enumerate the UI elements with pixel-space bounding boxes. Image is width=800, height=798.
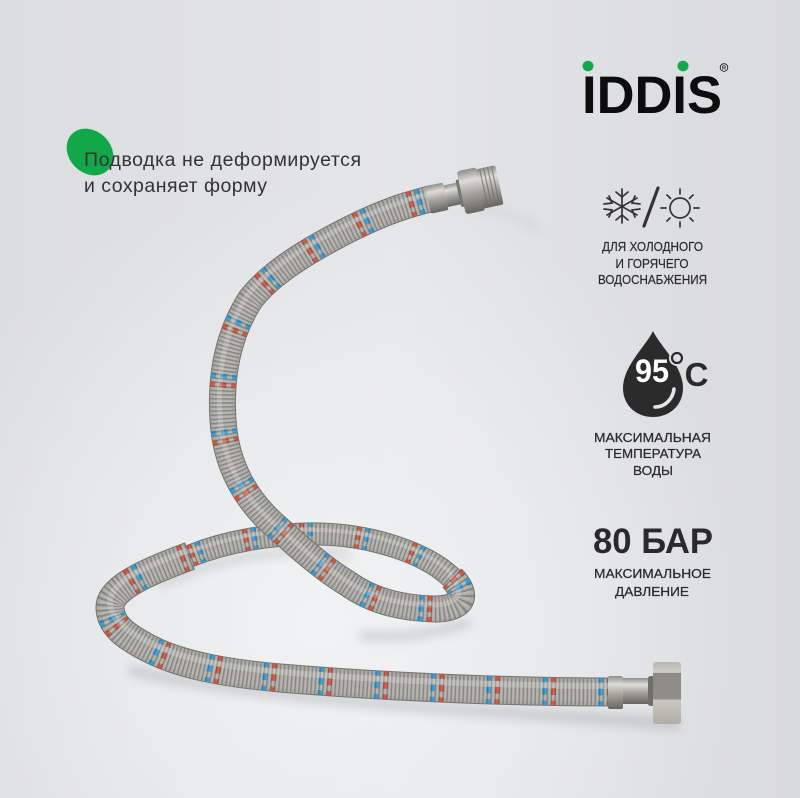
hose: bottom run and left of loop xyxy=(110,550,612,692)
hose: near loop and rising arc xyxy=(219,194,462,609)
green blob accent xyxy=(57,119,123,185)
icon: sun xyxy=(661,189,699,227)
caption: max pressure: ДАВЛЕНИЕ xyxy=(615,584,689,599)
caption: max pressure: МАКСИМАЛЬНОЕ xyxy=(594,566,711,581)
logo: IDDIS: IDDIS xyxy=(582,66,722,125)
feature text: shape retention xyxy=(84,149,361,197)
caption: max water temperature: ТЕМПЕРАТУРА xyxy=(605,446,701,461)
icon: water drop 95°C: 95 xyxy=(635,353,669,389)
caption: max water temperature: ВОДЫ xyxy=(633,463,673,478)
logo: IDDIS: R xyxy=(722,66,726,72)
caption: hot and cold supply: ДЛЯ ХОЛОДНОГО xyxy=(602,240,703,254)
feature text: shape retention: Подводка не деформируется xyxy=(84,149,361,171)
caption: hot and cold supply xyxy=(598,240,707,287)
caption: max water temperature xyxy=(594,430,711,478)
bottom female nut fitting xyxy=(608,662,681,724)
hose shadows xyxy=(130,205,680,724)
icon: water drop 95°C xyxy=(623,331,708,417)
hose: far side of loop xyxy=(190,530,452,578)
braided hose xyxy=(110,194,612,692)
feature text: shape retention: и сохраняет форму xyxy=(84,175,267,197)
caption: max pressure xyxy=(594,566,711,599)
heading: 80 bar: 80 БАР xyxy=(593,522,713,561)
caption: hot and cold supply: И ГОРЯЧЕГО xyxy=(616,257,689,271)
caption: max water temperature: МАКСИМАЛЬНАЯ xyxy=(594,430,711,445)
icon: snowflake xyxy=(604,189,640,223)
caption: hot and cold supply: ВОДОСНАБЖЕНИЯ xyxy=(598,273,707,287)
icon: water drop 95°C: C xyxy=(685,356,708,393)
top male threaded fitting xyxy=(423,163,504,222)
icon: slash xyxy=(644,188,658,226)
